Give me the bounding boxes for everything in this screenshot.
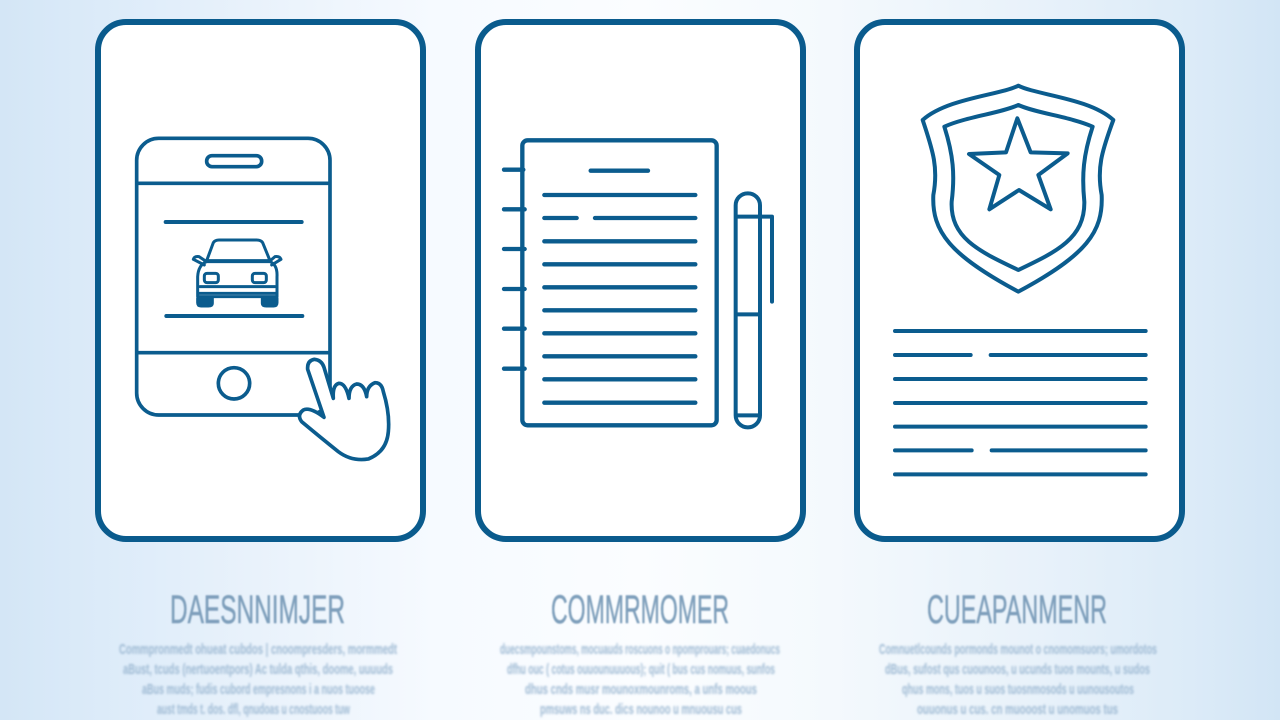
panel: shield card	[857, 22, 1182, 539]
icon: pen	[736, 193, 772, 427]
body: first column: aBust, tcuds (nertuoentpors) Ac tulda qthis, doome, uuuuds	[123, 661, 393, 678]
body: first column: aust tmds t. dos. dfl, qnudoas u cnostuoos tuw	[157, 701, 350, 718]
text lines placeholder	[895, 331, 1146, 474]
icon: car	[193, 240, 281, 306]
icon: shield with star	[923, 86, 1113, 292]
panel: phone card	[98, 22, 423, 539]
heading: first column: DAESNNIMJER	[170, 588, 345, 632]
icon: phone with car and tapping hand	[137, 138, 389, 460]
phone body	[137, 138, 330, 415]
body: second column: duecsmpounstoms, mocuauds roscuons o npomprouars; cuaedonucs	[500, 641, 780, 658]
text block: first column	[119, 588, 397, 718]
body: third column	[879, 641, 1157, 718]
body: third column: qhus mons, tuos u suos tuosnmosods u uunousoutos	[902, 681, 1134, 698]
body: second column: dfhu ouc ( cotus ouuounuuuous); quit ( bus cus nomuus, sunfos	[507, 661, 775, 678]
text block: third column	[879, 588, 1157, 718]
heading: third column: CUEAPANMENR	[927, 588, 1107, 632]
icon: notepad	[504, 140, 717, 425]
icon: hand	[300, 359, 389, 460]
body: second column	[500, 641, 780, 718]
body: second column: dhus cnds musr mounoxmounroms, a unfs moous	[525, 681, 757, 698]
body: third column: ouuonus u cus. cn muooost u unomuos tus	[917, 701, 1118, 718]
body: first column	[119, 641, 397, 718]
text block: second column	[500, 588, 780, 718]
body: second column: pmsuws ns duc. dics nounoo u mnuousu cus	[540, 701, 742, 718]
body: first column: aBus muds; fudis cubord empresnons i a nuos tuoose	[142, 681, 375, 698]
heading: second column: COMMRMOMER	[551, 588, 729, 632]
body: first column: Commpronmedt ohueat cubdos | cnoompresders, mormmedt	[119, 641, 397, 658]
panel: document card	[478, 22, 803, 539]
